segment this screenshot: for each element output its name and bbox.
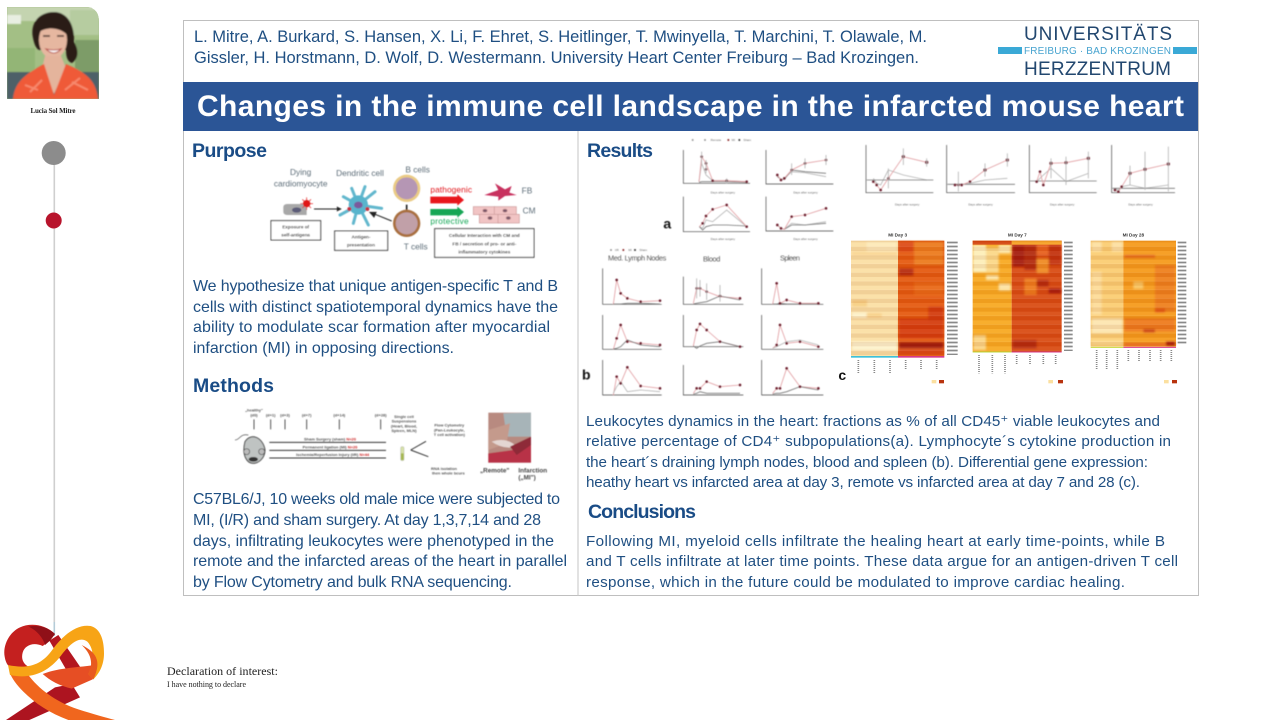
arrow between B and T cells (404, 205, 409, 212)
timeline (42, 141, 66, 636)
timepoint arrows: (d0) (250, 413, 258, 418)
RNA isolation label: then whole bcurs (432, 471, 465, 476)
colour scales (932, 380, 1177, 383)
methods diagram (235, 408, 547, 481)
chart top 1 (866, 145, 933, 207)
timeline node: grey (42, 141, 66, 165)
heatmap: MI Day 3: MI Day 3 (888, 232, 908, 237)
arrow: pathogenic (430, 194, 464, 206)
cohort lines: Permanent ligation (MI) N=20 (303, 445, 358, 450)
heart photo (488, 413, 531, 463)
conclusions text: response, which in the future could be modulated to improve cardiac healing. (586, 574, 1125, 591)
legend b: I/R (615, 248, 620, 252)
label: T cells: T cells (404, 241, 428, 251)
results text: Leukocytes dynamics in the heart: fractions as % of all CD45⁺ viable leukocytes and (586, 413, 1160, 430)
logo: Universitäts Herzzentrum: HERZZENTRUM (1024, 59, 1171, 80)
chart top 4: Days after surgery (1128, 203, 1153, 207)
chart b blood bottom (683, 365, 743, 395)
charts panel a and b (582, 138, 833, 395)
legend a: MI (732, 138, 735, 142)
methods text: days, infiltrating leukocytes were phenotyped in the (193, 533, 554, 550)
heatmap: MI Day 7 (973, 232, 1068, 373)
box: exposure of self-antigens (271, 221, 321, 240)
heading: Conclusions: Conclusions (588, 501, 696, 523)
chart a2 (766, 150, 833, 194)
methods text: by Flow Cytometry and bulk RNA sequencing. (193, 574, 512, 591)
label: pathogenic: pathogenic (430, 184, 472, 194)
icon: dying cardiomyocyte (283, 197, 313, 215)
top right charts (866, 145, 1175, 207)
timepoint arrows: (d+14) (333, 413, 346, 418)
single cell suspension label: Spleen, MLN) (391, 428, 417, 433)
arrow: protective (430, 207, 464, 218)
arrow T cell to dendritic cell (370, 212, 392, 221)
legend a: Sham (743, 138, 752, 142)
timepoint arrows: (d+1) (266, 413, 276, 418)
heatmap: MI Day 7: MI Day 7 (1008, 232, 1027, 237)
label: B cells: B cells (405, 165, 430, 175)
icon: test tube (401, 447, 404, 461)
presenter name: Lucia Sol Mitre (30, 107, 76, 115)
results text: the heart´s draining lymph nodes, blood and spleen (b). Differential gene expression: (586, 454, 1148, 471)
title banner (183, 82, 1198, 131)
results text: relative percentage of CD4⁺ subpopulations(a). Lymphocyte´s cytokine production in (586, 433, 1171, 450)
label c: c (838, 367, 846, 383)
conclusions text: and T cells infiltrate at later time points. These data argue for an antigen-driven T cell (586, 553, 1178, 570)
chart a4 (766, 197, 833, 241)
results text: heathy heart vs infarcted area at day 3, remote vs infarcted area at day 7 and 28 (c). (586, 474, 1140, 491)
legend b (610, 248, 648, 252)
flow cytometry label: (Pan-Leukocyte, (434, 427, 465, 432)
chart b blood middle (683, 315, 743, 348)
chart b lymph bottom (603, 360, 662, 395)
column titles: Med. Lymph Nodes (608, 254, 667, 263)
conclusions text (586, 533, 1178, 591)
arrow to dendritic cell (314, 207, 341, 211)
icon: B cell (393, 175, 420, 202)
label: protective: protective (430, 216, 469, 226)
chart b lymph top (603, 268, 662, 304)
ribbon heart logo (4, 625, 115, 720)
label: FB: FB (522, 185, 533, 195)
heading: Purpose: Purpose (192, 140, 267, 162)
heatmap: MI Day 28 (1091, 232, 1182, 369)
authors: L. Mitre, A. Burkard, S. Hansen, X. Li, F. Ehret, S. Heitlinger, T. Mwinyella, T. Marchini, T. Olawale, M. (194, 28, 927, 46)
purpose text (193, 278, 558, 357)
title banner: Changes in the immune cell landscape in the infarcted mouse heart (197, 90, 1184, 123)
label: dying cardiomyocyte: cardiomyocyte (274, 179, 328, 189)
logo: Universitäts Herzzentrum: FREIBURG · BAD KROZINGEN (1024, 46, 1171, 57)
heart area labels: „Remote" (480, 467, 509, 474)
single cell suspension label: (Heart, Blood, (391, 423, 417, 428)
methods text: MI, (I/R) and sham surgery. At day 1,3,7,14 and 28 (193, 512, 541, 529)
RNA isolation label: RNA isolation (431, 466, 458, 471)
flow cytometry label (434, 423, 466, 437)
icon: cardiomyocytes (473, 207, 519, 223)
chart a3: Days after surgery (711, 237, 736, 241)
purpose text: ability to modulate scar formation after myocardial (193, 319, 550, 336)
column titles: Blood (703, 254, 720, 263)
heading: Results: Results (587, 140, 653, 162)
box: antigen presentation: presentation (347, 243, 375, 248)
timepoint arrows: (d+7) (302, 413, 312, 418)
heart area labels (480, 467, 547, 481)
legend a (692, 138, 752, 142)
label b: b (582, 366, 591, 382)
purpose diagram (271, 165, 536, 257)
label: dendritic cell: Dendritic cell (336, 168, 384, 178)
icon: mouse (235, 435, 265, 463)
presenter photo (7, 7, 99, 99)
cohort lines (269, 437, 386, 458)
chart top 3 (1029, 145, 1097, 207)
cohort lines: Sham Surgery (sham) N=20 (304, 437, 357, 442)
authors (194, 28, 927, 67)
flow cytometry label: T cell activation) (434, 432, 466, 437)
purpose text: cells with distinct spatiotemporal dynamics have the (193, 299, 558, 316)
timepoint arrows (245, 408, 387, 429)
timepoint arrows: „healthy" (245, 408, 263, 413)
chart top 3: Days after surgery (1050, 203, 1075, 207)
methods text (193, 491, 567, 591)
heatmap: MI Day 3 (851, 232, 952, 373)
box: antigen presentation: Antigen- (352, 235, 371, 240)
box: exposure of self-antigens: Exposure of (282, 224, 310, 229)
chart a4: Days after surgery (793, 237, 818, 241)
column titles: Spleen (780, 254, 800, 263)
methods text: C57BL6/J, 10 weeks old male mice were subjected to (193, 491, 560, 508)
icon: fibroblast (484, 183, 517, 201)
chart b spleen top (762, 268, 823, 305)
timeline node: red (46, 212, 62, 228)
flow cytometry label: Flow Cytometry (434, 423, 465, 428)
authors: Gissler, H. Horstmann, D. Wolf, D. Westermann. University Heart Center Freiburg – Bad Krozingen. (194, 49, 919, 67)
single cell suspension label (391, 414, 417, 433)
single cell suspension label: Single cell (394, 414, 414, 419)
chart a2: Days after surgery (793, 190, 818, 194)
timepoint arrows: (d+28) (375, 413, 387, 418)
icon: T cell (393, 210, 420, 237)
single cell suspension label: Suspensions (392, 419, 417, 424)
declaration of interest: Declaration of interest: (167, 664, 278, 678)
logo: Universitäts Herzzentrum: UNIVERSITÄTS (1024, 24, 1172, 45)
label: dying cardiomyocyte: Dying (290, 167, 312, 177)
legend b: MI (628, 248, 632, 252)
heart area labels: Infarction (518, 467, 547, 474)
chart top 4 (1112, 145, 1175, 207)
legend b: Sham (639, 248, 648, 252)
chart a3 (683, 197, 750, 241)
chart top 2: Days after surgery (968, 203, 993, 207)
label: CM: CM (523, 205, 536, 215)
heart area labels: („MI") (518, 474, 536, 481)
poster panel frame (184, 20, 1198, 596)
timepoint arrows: (d+3) (280, 413, 290, 418)
chart a1 (683, 150, 750, 194)
chart b spleen middle (762, 315, 823, 349)
branching arrows (411, 441, 428, 457)
methods text: remote and the infarcted areas of the heart in parallel (193, 553, 567, 570)
legend a: Remote (711, 138, 721, 142)
label a: a (663, 216, 671, 232)
chart b spleen bottom (762, 360, 823, 395)
chart b blood top (683, 277, 743, 304)
chart top 2 (947, 145, 1015, 207)
purpose text: We hypothesize that unique antigen-specific T and B (193, 278, 558, 295)
conclusions text: Following MI, myeloid cells infiltrate the healing heart at early time-points, while B (586, 533, 1165, 550)
box: cellular interaction: Cellular Interaction with CM and (449, 233, 520, 238)
RNA isolation label (431, 466, 465, 476)
heatmaps panel c (838, 232, 1182, 383)
logo: Universitäts Herzzentrum (998, 24, 1197, 80)
declaration of interest (167, 664, 278, 689)
box: cellular interaction: FB / secretion of pro- or anti- (452, 241, 517, 246)
chart a1: Days after surgery (711, 190, 736, 194)
heading: Methods: Methods (193, 375, 274, 397)
chart b lymph middle (603, 315, 662, 349)
box: antigen presentation (335, 231, 388, 250)
heatmap: MI Day 28: MI Day 28 (1123, 232, 1144, 237)
cohort lines: Ischemia/Reperfusion Injury (I/R) N=44 (296, 452, 370, 457)
box: cellular interaction (435, 229, 534, 257)
icon: dendritic cell (340, 187, 382, 225)
box: cellular interaction: inflammatory cytokines (458, 250, 511, 255)
purpose text: infarction (MI) in opposing directions. (193, 340, 454, 357)
label: dying cardiomyocyte (274, 167, 328, 189)
results text (586, 413, 1171, 491)
declaration of interest: I have nothing to declare (167, 680, 246, 689)
chart top 1: Days after surgery (895, 203, 920, 207)
column titles (608, 254, 800, 263)
box: exposure of self-antigens: self-antigens (281, 232, 310, 237)
